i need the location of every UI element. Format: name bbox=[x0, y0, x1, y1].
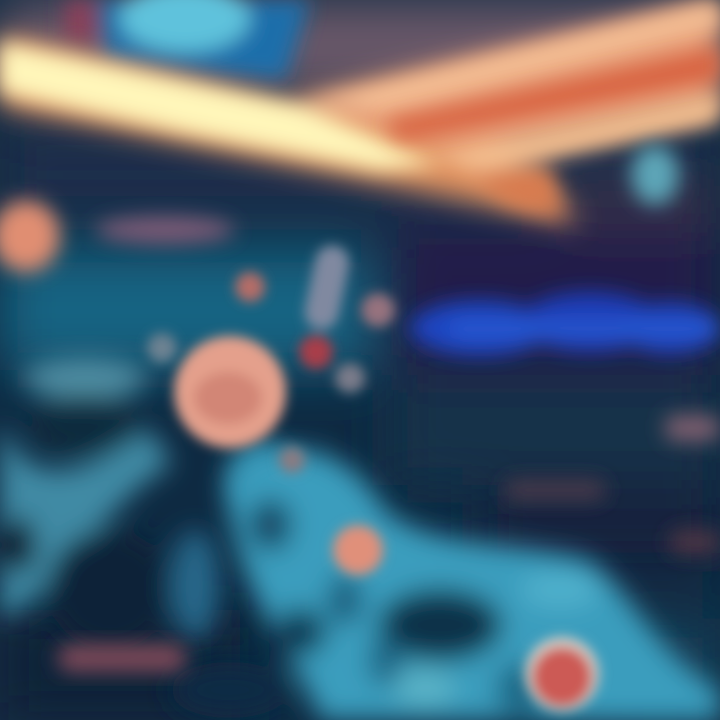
text block: blurred blue heading bbox=[410, 292, 720, 356]
beam: cream light band bbox=[0, 0, 720, 215]
icon: small salmon circle on wave bbox=[333, 525, 383, 575]
chart: dark wave shapes on left bbox=[0, 358, 290, 650]
icon: red circle bottom right bbox=[525, 637, 599, 711]
icon: pale blue orb upper right bbox=[631, 145, 679, 205]
text block: blurred pale right side bbox=[505, 415, 720, 554]
beam: orange diagonal glow bbox=[0, 0, 720, 225]
beam: red-orange streak bbox=[385, 48, 720, 140]
text block: blurred label bottom left bbox=[58, 644, 186, 672]
blob: orange label left bbox=[0, 200, 235, 272]
chart: bright cyan flowing wave bbox=[170, 449, 720, 720]
icon: molecule satellite nodes bbox=[147, 242, 395, 473]
panel: blue screen at top bbox=[65, 0, 310, 80]
icon: large central salmon circle bbox=[174, 336, 286, 448]
